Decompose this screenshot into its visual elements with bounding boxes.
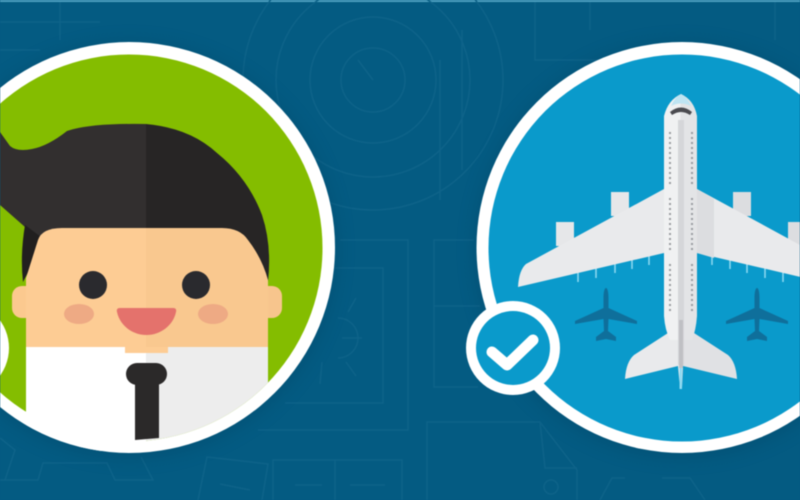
blue disc: [488, 54, 800, 442]
hair: [0, 124, 269, 282]
check mark: [492, 340, 533, 365]
cheeks: [64, 304, 228, 324]
airplane badge: [466, 42, 800, 457]
outlined panel with sun: [258, 240, 408, 430]
soft shadow: [475, 43, 800, 457]
green disc: [0, 54, 322, 442]
flap ticks: [578, 255, 783, 282]
lower right shape: [600, 478, 705, 500]
person badge: [0, 42, 336, 457]
shirt: [26, 347, 268, 451]
face: [26, 228, 268, 353]
tail: [625, 333, 737, 389]
wings: [518, 189, 800, 287]
white ring: [476, 42, 800, 453]
ears: [12, 286, 282, 318]
eyes: [79, 271, 210, 299]
document outline: [427, 422, 577, 500]
soft shadow: [0, 43, 336, 457]
person check badge: [0, 301, 9, 395]
right panel outline: [434, 240, 480, 387]
fuselage: [664, 94, 697, 368]
neck: [125, 347, 168, 353]
passenger windows: [670, 132, 692, 314]
mouth: [117, 308, 176, 335]
person figure: [0, 124, 282, 451]
nose tip: [671, 94, 691, 106]
top edge highlight: [0, 0, 800, 2]
white ring: [0, 42, 335, 453]
check badge: [466, 301, 560, 395]
small plane silhouettes: [575, 288, 788, 341]
airplane: [518, 94, 800, 389]
cockpit window: [670, 108, 692, 115]
tie: [126, 363, 167, 440]
book and cards: [198, 457, 402, 500]
upper corner outlines: [0, 2, 775, 200]
radar rings: [243, 0, 503, 210]
tent shape: [0, 438, 153, 480]
engines: [556, 192, 800, 246]
